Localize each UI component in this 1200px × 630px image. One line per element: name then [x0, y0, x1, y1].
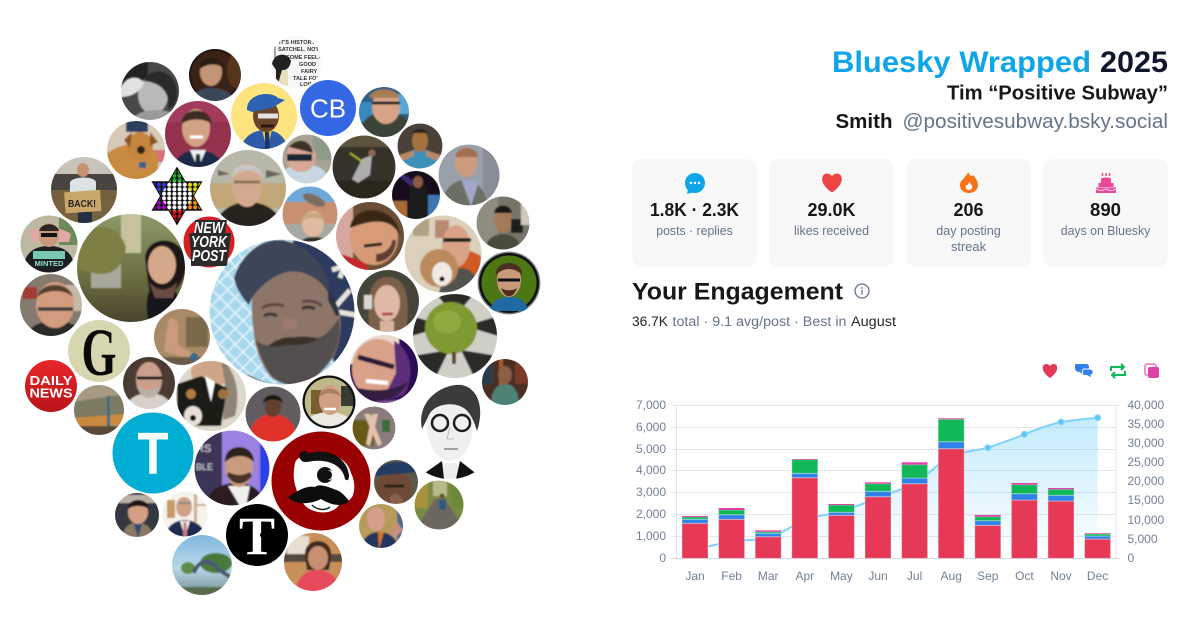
stacked bars — [682, 418, 1111, 558]
avatar: pencil sketch man with glasses — [421, 384, 480, 479]
month labels: Jan — [685, 569, 705, 583]
cumulative area — [695, 418, 1098, 558]
avatar: woman in pink sweater — [283, 532, 343, 592]
month labels: Jul — [907, 569, 922, 583]
legend: reposts — [1111, 364, 1125, 378]
right axis labels: 30,000 — [1128, 436, 1165, 450]
avatar: coaster by water — [171, 534, 233, 596]
avatar: Daily News logo: DAILY — [29, 374, 73, 388]
left axis labels: 0 — [659, 551, 666, 565]
avatar: man in dark suit — [189, 49, 241, 101]
month labels: Apr — [795, 569, 814, 583]
avatar: New York Post logo: YORK — [191, 234, 228, 251]
month labels: Nov — [1050, 569, 1072, 583]
avatar: woman in library — [481, 358, 529, 406]
left axis labels: 2,000 — [636, 507, 666, 521]
avatar: comic panel: SATCHEL. NOT — [278, 47, 319, 53]
avatar: New York Post logo: NEW — [194, 220, 226, 237]
right axis labels: 35,000 — [1128, 417, 1165, 431]
icon: heart — [822, 174, 842, 192]
engagement chart — [636, 398, 1165, 583]
avatar: runner on forest path — [414, 480, 465, 530]
avatar: G logo: G — [82, 314, 116, 390]
right axis labels: 25,000 — [1128, 455, 1165, 469]
avatar: bald man with black border — [302, 376, 356, 428]
avatar: protester with sign — [50, 156, 118, 224]
heading: Your Engagement: Your Engagement — [632, 278, 843, 306]
avatar: man on TV set: RS — [196, 443, 211, 455]
avatar: senator pointing — [359, 504, 403, 548]
left axis labels: 3,000 — [636, 485, 666, 499]
avatar: Daily News logo — [25, 360, 77, 412]
left axis labels: 1,000 — [636, 529, 666, 543]
avatar: T logo — [112, 412, 194, 494]
avatar: woman in red jacket — [245, 386, 301, 442]
avatar: dog and woman — [175, 357, 247, 432]
avatar: night field batter — [332, 135, 396, 199]
avatar: tree in perspective — [412, 293, 498, 379]
avatar: cartoon man on yellow — [230, 82, 298, 150]
avatar: man in grey jacket — [438, 144, 501, 206]
stat card: days on Bluesky: days on Bluesky — [1061, 224, 1151, 238]
right axis labels — [1128, 398, 1165, 565]
avatar: man in red shirt — [335, 201, 405, 271]
avatar: smiling man purple light — [349, 334, 419, 405]
engagement summary: 36.7K — [632, 314, 668, 329]
avatar: stage performer — [391, 170, 442, 220]
avatar: New York Post logo: POST — [192, 248, 227, 265]
avatar: man in cap, main profile photo — [209, 239, 357, 394]
stat card: day posting streak: streak — [951, 240, 987, 254]
month labels — [685, 569, 1108, 583]
avatar: New York Times logo: T — [239, 506, 275, 566]
avatar: New York Post logo — [184, 216, 234, 268]
profile name and handle: Smith — [836, 111, 892, 133]
avatar: cartoon bearded man on green — [478, 252, 540, 314]
avatar: man with child on shoulders — [20, 215, 79, 273]
stat card: posts and replies — [632, 159, 757, 267]
stat card: days on Bluesky: 890 — [1090, 200, 1121, 220]
avatar: bearded man in blue shirt — [398, 124, 442, 168]
avatar: man with child on shoulders: MINTED — [35, 259, 64, 268]
profile name and handle: @positivesubway.bsky.social — [902, 111, 1168, 133]
avatar: man selfie with glasses — [20, 274, 82, 336]
month labels: Jun — [868, 569, 888, 583]
month labels: Sep — [977, 569, 999, 583]
avatar: New York Times building — [73, 384, 125, 436]
icon: birthday cake — [1096, 173, 1116, 193]
stat card: days on Bluesky — [1043, 159, 1168, 267]
left axis labels: 7,000 — [636, 398, 666, 412]
avatar: woman in autumn park — [76, 213, 187, 323]
month labels: Mar — [758, 569, 779, 583]
legend: likes — [1043, 364, 1057, 378]
title: 2025 — [1100, 46, 1168, 79]
month labels: May — [830, 569, 853, 583]
avatar: golden dog — [106, 120, 166, 180]
avatar: Chinese checkers star — [152, 168, 202, 224]
avatar: protester with sign: BACK! — [68, 199, 96, 210]
month labels: Feb — [721, 569, 742, 583]
avatar: man with white hair — [209, 149, 287, 227]
avatar: comic panel: GOOD — [299, 62, 316, 68]
month labels: Aug — [941, 569, 962, 583]
left axis labels: 4,000 — [636, 463, 666, 477]
right axis labels: 20,000 — [1128, 474, 1165, 488]
avatar: New York Times logo — [226, 504, 288, 566]
avatar: black and white man — [121, 62, 179, 120]
avatar: comic panel: IT'S HISTORY — [279, 40, 315, 46]
avatar: man behind phone — [476, 196, 530, 250]
engagement summary — [632, 314, 896, 329]
avatar: woman with headset — [282, 134, 332, 184]
avatar: comic panel — [272, 40, 320, 86]
right axis labels: 10,000 — [1128, 513, 1165, 527]
right axis labels: 5,000 — [1128, 532, 1158, 546]
engagement summary: August — [851, 314, 896, 329]
stat card: posts and replies: 1.8K · 2.3K — [650, 200, 739, 220]
left axis labels: 5,000 — [636, 442, 666, 456]
icon: info — [855, 284, 869, 298]
right axis labels: 40,000 — [1128, 398, 1165, 412]
cumulative line — [695, 418, 1098, 550]
avatar: man on TV set: BLE — [196, 462, 213, 472]
month labels: Oct — [1015, 569, 1034, 583]
stat card: day posting streak: 206 — [954, 200, 984, 220]
avatar: woman with long brown hair — [356, 269, 420, 333]
avatar: T logo: T — [138, 421, 168, 487]
icon: chat bubble — [685, 173, 705, 194]
stat card: day posting streak: day posting — [936, 224, 1001, 238]
engagement summary: total · 9.1 avg/post · Best in — [672, 314, 846, 329]
avatar: man with glasses — [359, 87, 409, 137]
avatar: comic panel: TALE FOR — [293, 76, 321, 82]
avatar: comic panel: LOWS — [300, 82, 317, 88]
avatar: Daily News logo: NEWS — [30, 386, 72, 400]
avatar: woman with pigeon — [282, 186, 338, 242]
avatar: yoga pose in warm room — [153, 308, 211, 367]
stat card: posts and replies: posts · replies — [656, 224, 733, 238]
stat card: day posting streak — [906, 159, 1031, 267]
profile name and handle — [836, 82, 1168, 133]
avatar: bald man with glasses and beard — [123, 357, 175, 409]
month labels: Dec — [1087, 569, 1108, 583]
left axis labels: 6,000 — [636, 420, 666, 434]
legend: quotes — [1145, 364, 1159, 378]
stat card: likes received: likes received — [794, 224, 869, 238]
avatar: comic panel: SOME FEEL- — [286, 55, 320, 61]
avatar cluster — [19, 36, 540, 596]
avatar: smiling man on maroon — [164, 100, 232, 168]
avatar: legs on gold couch — [352, 406, 396, 450]
avatar: man on TV set — [194, 430, 272, 506]
avatar: man in navy suit with cross — [162, 491, 208, 537]
stat card: likes received: 29.0K — [808, 200, 856, 220]
avatar: CB initials — [300, 80, 356, 136]
line markers — [985, 415, 1101, 451]
avatar: CB initials: CB — [310, 94, 346, 124]
avatar: man with curly dog — [404, 215, 482, 293]
left axis labels — [636, 398, 666, 565]
avatar: comic panel: FAIRY — [301, 69, 318, 75]
avatar: man in blue cap — [373, 459, 419, 505]
right axis labels: 15,000 — [1128, 493, 1165, 507]
profile name and handle: Tim “Positive Subway” — [947, 82, 1168, 104]
legend: replies — [1075, 364, 1093, 378]
title: Bluesky Wrapped — [832, 46, 1091, 79]
right axis labels: 0 — [1128, 551, 1134, 565]
stat card: likes received — [769, 159, 894, 267]
icon: flame — [960, 172, 978, 193]
avatar: smiling man in tan jacket — [114, 492, 160, 538]
chart legend — [1043, 364, 1159, 378]
avatar: Natty Boh logo — [272, 432, 370, 530]
